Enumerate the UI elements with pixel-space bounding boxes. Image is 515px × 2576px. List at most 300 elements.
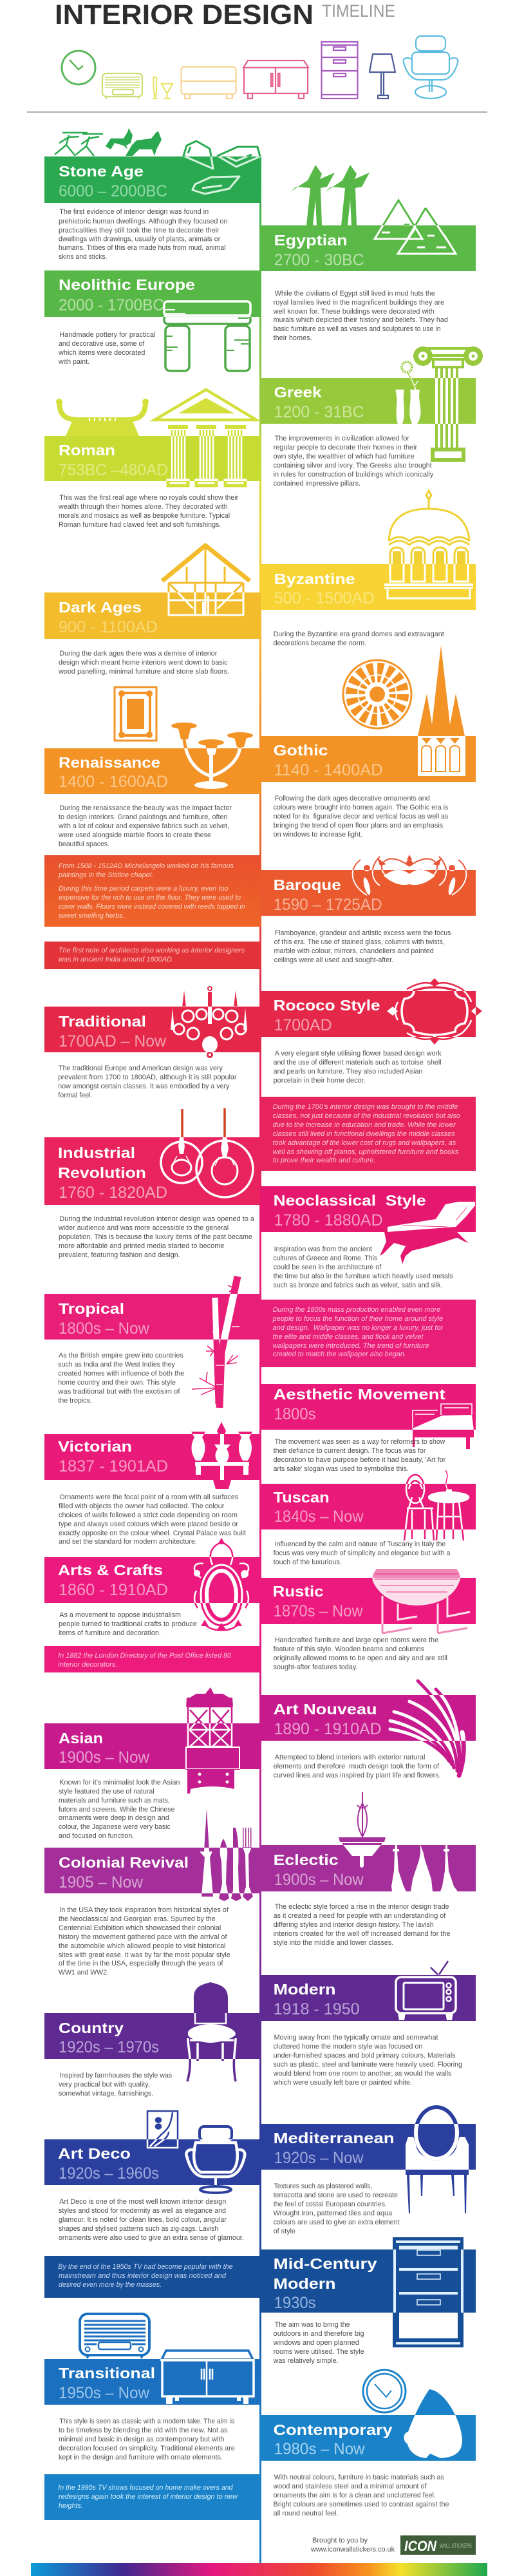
description: and focused on function.	[59, 1832, 134, 1840]
bar	[44, 1294, 261, 1340]
icon: cutlery	[200, 1808, 253, 1901]
section: Asian	[44, 1687, 261, 1840]
bar	[44, 1137, 261, 1205]
heading: Industrial	[58, 1144, 135, 1161]
callout: mass production: wallpapers were introduced. The trend of furniture	[273, 1342, 429, 1350]
description	[59, 1611, 197, 1637]
description: all round neutral feel.	[274, 2510, 339, 2517]
description: Inspired by farmhouses the style was	[59, 2072, 173, 2079]
centre timeline line	[259, 156, 261, 2563]
section: Tropical	[44, 1276, 261, 1408]
description	[58, 331, 156, 366]
description	[58, 650, 229, 676]
logo: WALL STICKERS	[440, 2543, 472, 2549]
description: ornaments the aim is for a clean and uncluttered feel.	[274, 2492, 436, 2499]
description: more affordable and printed media started to become	[59, 1242, 224, 1250]
icon: cabinet	[186, 1687, 239, 1794]
description: WW1 and WW2.	[59, 1969, 109, 1976]
description: A very elegant style utilising flower based design work	[275, 1050, 442, 1057]
icon: sideboard	[243, 61, 308, 99]
icon: armchair	[404, 36, 458, 99]
heading: Mid-Century	[274, 2255, 377, 2272]
callout: 1990s TV	[44, 2474, 261, 2520]
description: and set the standard for modern architecture.	[59, 1538, 197, 1546]
description: style featured the use of natural	[59, 1788, 154, 1795]
description: somewhat vintage, furnishings.	[59, 2090, 153, 2098]
description: home country and their own. This style	[58, 1379, 176, 1387]
heading: Revolution	[58, 1164, 146, 1181]
callout: middle classes	[260, 1097, 476, 1171]
dates: 1900s – Now	[274, 1871, 364, 1889]
icon: ottoman	[182, 67, 236, 99]
description: ceilings were all used and sought-after.	[274, 956, 393, 964]
description: with a lot of colour and expensive fabrics such as velvet,	[58, 822, 229, 830]
heading: Mediterranean	[274, 2130, 395, 2146]
bar	[260, 1484, 476, 1530]
description: minimal and basic in design as contemporary but with	[59, 2436, 224, 2443]
description: colour, the Japanese were very basic	[59, 1823, 171, 1831]
dates: 1918 - 1950	[274, 2000, 360, 2018]
logo	[400, 2535, 476, 2555]
description: very practical but with quality,	[59, 2081, 150, 2088]
bar	[260, 1186, 476, 1232]
description	[59, 1779, 180, 1840]
description: Influenced by the calm and nature of Tuscany in Italy the	[275, 1540, 445, 1548]
description: population. This is because the luxury items of the past became	[59, 1233, 252, 1241]
description: Attempted to blend interiors with exterior natural	[275, 1754, 425, 1761]
description: well known for. These buildings were decorated with	[273, 308, 435, 316]
icon: hunters and deer	[55, 128, 162, 156]
description: marble with colour, mirrors, chandeliers and painted	[274, 947, 434, 955]
callout: London Directory	[44, 1646, 261, 1672]
icon: painting	[147, 2111, 178, 2148]
bar	[260, 991, 476, 1037]
description	[58, 494, 239, 529]
dates: 1890 - 1910AD	[274, 1720, 382, 1738]
description: sought-after features today.	[274, 1663, 357, 1671]
icon: spires	[418, 645, 465, 776]
heading: Rococo Style	[274, 997, 380, 1014]
heading: Contemporary	[274, 2421, 393, 2438]
heading: Art Deco	[58, 2145, 131, 2162]
icon: chair	[187, 1982, 236, 2081]
description	[59, 208, 228, 261]
description	[274, 1245, 453, 1289]
icon: drop-leaf table	[373, 1569, 470, 1633]
heading: Aesthetic Movement	[274, 1386, 445, 1403]
description: of style	[274, 2228, 295, 2235]
bar	[44, 1723, 261, 1769]
icon: dressing table	[406, 2107, 469, 2213]
section: Mid-Century Modern	[260, 2237, 476, 2365]
description: Centennial Exhibition which showcased their colonial	[59, 1924, 221, 1932]
description	[59, 2198, 244, 2242]
description: choices of walls followed a strict code depending on room	[59, 1511, 238, 1519]
description: sites with great ease. It was by far the most popular style	[59, 1951, 230, 1959]
callout: Michelangelo and carpets	[44, 855, 261, 927]
description: wealth through their homes alone. They decorated with	[58, 503, 228, 511]
description: filled with objects the owner had collected. The colour	[59, 1502, 225, 1510]
icon: pendant lamp	[339, 1792, 386, 1868]
callout: 1950s TV	[44, 2256, 261, 2298]
description	[273, 2034, 462, 2087]
description: cluttered home the modern style was focused on	[274, 2043, 422, 2050]
bar	[44, 156, 261, 203]
dates: 1700AD – Now	[59, 1032, 167, 1050]
description: decorations became the norm.	[274, 639, 366, 647]
callout: Michelangelo and carpets: During this time period carpets were a luxury, even too	[59, 885, 229, 893]
description: The first evidence of interior design was found in	[59, 208, 209, 216]
description: could be seen in the architecture of	[274, 1264, 382, 1271]
description	[274, 630, 444, 647]
section: Modern	[260, 1961, 476, 2087]
section: Dark Ages	[44, 545, 261, 676]
bar	[44, 1557, 261, 1603]
callout: mass production	[260, 1300, 476, 1367]
dates: 1760 - 1820AD	[59, 1184, 167, 1202]
dates: 1700AD	[274, 1016, 332, 1034]
icon: lamp	[370, 54, 395, 99]
icon: plume	[390, 1681, 464, 1776]
section: Traditional	[44, 987, 261, 1099]
dates: 1800s – Now	[59, 1320, 150, 1338]
dates: 1780 - 1880AD	[274, 1211, 383, 1229]
rainbow footer bar	[31, 2563, 487, 2576]
bar	[260, 2415, 476, 2461]
icon: stones	[183, 141, 260, 194]
description: Art Deco is one of the most well known interior design	[59, 2198, 226, 2206]
bar	[260, 1975, 476, 2021]
heading: Dark Ages	[59, 599, 142, 616]
heading: Roman	[59, 442, 115, 459]
icon: vases and flower	[395, 362, 420, 424]
heading	[58, 1144, 146, 1181]
bar	[260, 564, 476, 610]
section: Country	[44, 1982, 261, 2098]
callout: London Directory: interior decorators.	[58, 1661, 118, 1669]
section: Tuscan	[260, 1470, 476, 1566]
description: humans. Tribes of this era made huts from mud, animal	[59, 244, 225, 252]
callout: Michelangelo and carpets: paintings in the Sistine chapel.	[58, 871, 153, 879]
description: During the dark ages there was a demise of interior	[59, 650, 218, 658]
section: Stone Age	[44, 128, 261, 261]
callout: middle classes: due to the increase in education and trade. While the lower	[273, 1121, 456, 1129]
bar	[44, 2139, 261, 2185]
bar	[260, 225, 476, 271]
icon: figures	[290, 165, 370, 225]
bar	[260, 870, 476, 916]
furniture icon row	[62, 36, 458, 99]
description: their defiance to current design. The focus was for	[274, 1447, 426, 1455]
bar	[260, 736, 476, 782]
section: Mediterranean	[260, 2107, 476, 2235]
bar	[44, 748, 261, 794]
dates: 900 - 1100AD	[59, 618, 158, 636]
description: styles and stood for modernity as well as elegance and	[59, 2207, 226, 2215]
icon: radio	[80, 2314, 149, 2359]
dates: 1837 - 1901AD	[59, 1457, 168, 1475]
description: was traditional but with the exotisim of	[57, 1388, 180, 1396]
section: Contemporary	[260, 2370, 476, 2517]
icon: candelabra	[171, 723, 253, 789]
description: dwellings with drawings, usually of plants, animals or	[59, 236, 221, 243]
description: originally allowed rooms to be open and airy and are still	[274, 1654, 447, 1662]
description: The traditional Europe and American design was very	[59, 1065, 223, 1072]
heading: Country	[59, 2020, 124, 2036]
description: rooms were utilised. The style	[274, 2348, 364, 2356]
description: on windows to increase light.	[274, 831, 362, 838]
description: style into the middle and lower classes.	[274, 1939, 393, 1947]
description: noted for its figurative decor and vertical focus as well as	[274, 813, 449, 820]
description: elements and therefore much design took the form of	[274, 1763, 440, 1770]
description: were used alongside marble floors to create these	[58, 831, 211, 839]
dates: 6000 – 2000BC	[59, 182, 167, 200]
description	[274, 929, 451, 964]
description: regular people to decorate their homes in their	[274, 444, 418, 451]
dates: 2700 - 30BC	[274, 251, 364, 269]
bar	[44, 1434, 261, 1480]
description: Wrought iron, patterned tiles and aqua	[274, 2210, 393, 2217]
description: their homes.	[274, 334, 312, 342]
description: Moving away from the typically ornate and somewhat	[274, 2034, 438, 2041]
description: was relatively simple.	[273, 2357, 339, 2365]
callout: 1990s TV: heights.	[59, 2502, 83, 2510]
dates: 1800s	[274, 1405, 316, 1423]
description: Handmade pottery for practical	[59, 331, 156, 339]
bar	[44, 592, 261, 639]
section: Rococo Style	[260, 978, 482, 1084]
icon: vases	[391, 1844, 458, 1891]
description: morals and mosaics as well as bespoke furniture. Typical	[59, 512, 230, 520]
logo: ICON	[404, 2538, 437, 2554]
dates: 1920s – Now	[274, 2149, 364, 2167]
description: Known for it's minimalist look the Asian	[59, 1779, 180, 1786]
description	[59, 1906, 230, 1976]
description: the tropics.	[58, 1397, 92, 1405]
callout: Michelangelo and carpets: sweet smelling herbs.	[59, 912, 125, 920]
bar	[44, 2359, 261, 2405]
description: formal feel.	[58, 1092, 93, 1099]
icon: chaise longue	[380, 1202, 475, 1264]
section: Neoclassical Style	[260, 1186, 476, 1289]
section: Art Nouveau	[260, 1681, 476, 1779]
heading: Asian	[59, 1730, 103, 1747]
description: which were usually left bare or painted white.	[273, 2079, 412, 2087]
description: Inspiration was from the ancient	[274, 1245, 372, 1253]
description	[273, 2474, 449, 2517]
section: Transitional	[44, 2314, 261, 2461]
callout: London Directory: In 1882 the London Directory of the Post Office listed 80	[58, 1652, 232, 1660]
heading: Byzantine	[274, 571, 355, 587]
description	[274, 435, 434, 488]
description: history the movement gathered pace with the arrival of	[59, 1933, 227, 1941]
heading: Neolithic Europe	[59, 276, 195, 293]
description	[58, 1065, 237, 1099]
icon: bamboo	[192, 1276, 239, 1408]
description: created homes with influence of both the	[58, 1370, 184, 1378]
description: colours are used to give an extra element	[274, 2219, 399, 2226]
description	[59, 2418, 235, 2461]
description: During the Byzantine era grand domes and extravagant	[274, 630, 444, 638]
description: During the industrial revolution interior design was opened to a	[59, 1215, 255, 1223]
description	[274, 1754, 441, 1779]
heading: Renaissance	[59, 754, 160, 771]
callout: architects in India: The first note of architects also working as interior designers	[59, 947, 245, 954]
description: terracotta and stone are used to recreate	[274, 2192, 398, 2199]
heading: Greek	[274, 384, 322, 401]
callout: mass production: created to match the wallpaper also began.	[273, 1350, 406, 1358]
title: INTERIOR DESIGN	[55, 0, 314, 30]
icon: rose window	[343, 660, 411, 728]
heading: Gothic	[274, 742, 328, 759]
section: Baroque	[260, 855, 476, 964]
description: windows and open planned	[273, 2339, 359, 2347]
heading: Rustic	[273, 1583, 324, 1600]
dates: 1950s – Now	[59, 2384, 150, 2402]
description: glamour. It is noted for clean lines, bold colour, angular	[59, 2216, 227, 2224]
description: the automobile which allowed people to visit historical	[59, 1942, 225, 1950]
callout: Michelangelo and carpets: expensive for the rich to use on the floor. They were used to	[59, 894, 241, 902]
description	[274, 1050, 442, 1084]
description: and decorative use, some of	[59, 340, 145, 348]
description: Following the dark ages decorative ornaments and	[275, 795, 430, 802]
heading: Tuscan	[274, 1489, 330, 1506]
description	[58, 1215, 255, 1259]
description	[274, 795, 449, 838]
icon: armchair	[186, 2126, 245, 2193]
description: ornaments were also used to give an extra sense of glamour.	[59, 2234, 244, 2242]
description: the time but also in the furniture which heavily used metals	[274, 1273, 453, 1280]
section: Gothic	[260, 645, 476, 838]
dates: 1900s – Now	[59, 1748, 150, 1766]
heading	[274, 2255, 377, 2292]
callout: middle classes: to prove their wealth and culture.	[273, 1157, 376, 1164]
description: As the British empire grew into countries	[59, 1352, 183, 1359]
description: As a movement to oppose industrialism	[59, 1611, 181, 1619]
description: With neutral colours, furniture in basic materials such as	[274, 2474, 444, 2481]
icon: picture frame	[115, 687, 156, 741]
description: of this era. The use of stained glass, columns with twists,	[274, 938, 445, 946]
description: wood panelling, minimal furniture and stone slab floors.	[58, 668, 229, 676]
credit	[310, 2537, 395, 2553]
description	[57, 1352, 184, 1405]
description: decoration focused on simplicity. Traditional elements are	[59, 2445, 235, 2452]
description: differing styles and interior design history. The lavish	[274, 1921, 434, 1929]
dates: 500 - 1500AD	[274, 589, 375, 607]
description	[59, 1493, 246, 1546]
description: touch of the luxurious.	[274, 1558, 342, 1566]
description	[274, 2183, 399, 2235]
heading: Modern	[274, 1981, 336, 1998]
description: futons and screens. While the Chinese	[59, 1806, 175, 1814]
callout: Michelangelo and carpets: cover walls. Floors were instead covered with reeds topped in	[59, 903, 245, 911]
dates: 1980s – Now	[274, 2440, 365, 2458]
bar	[260, 1695, 476, 1741]
description: The improvements in civilization allowed for	[275, 435, 409, 442]
description	[274, 1438, 446, 1473]
description: feature of this style. Wooden beams and columns	[274, 1645, 424, 1653]
description	[274, 1540, 451, 1566]
callout: 1990s TV: In the 1990s TV shows focused on home make overs and	[58, 2484, 233, 2492]
description: the Neoclassical and Georgian eras. Spurred by the	[59, 1915, 216, 1923]
heading: Eclectic	[274, 1852, 339, 1868]
section: Renaissance	[44, 687, 261, 848]
description: basic furniture as well as vases and sculptures to use in	[274, 325, 441, 333]
icon: filing cabinet	[322, 42, 358, 99]
section: Art Deco	[44, 2111, 261, 2242]
dates: 1140 - 1400AD	[274, 761, 383, 779]
description: This style is seen as classic with a modern take. The aim is	[59, 2418, 235, 2425]
description: murals which depicted their history and beliefs. They had	[274, 316, 448, 324]
description: exactly opposite on the colour wheel. Crystal Palace was built	[59, 1530, 246, 1537]
title: TIMELINE	[322, 1, 395, 21]
heading: Baroque	[274, 876, 341, 893]
description	[58, 804, 232, 848]
callout: 1950s TV: mainstream and thus interior design was noticed and	[59, 2272, 227, 2280]
dates: 2000 - 1700BC	[59, 296, 164, 314]
description: cultures of Greece and Rome. This	[274, 1255, 378, 1262]
callout: mass production: people to focus the function of their home around style	[272, 1315, 443, 1323]
description	[274, 1636, 447, 1671]
description: such as plastic, steel and laminate were heavily used. Flooring	[274, 2061, 462, 2069]
description: kept in the design and furniture with ornate elements.	[59, 2454, 223, 2461]
description: of the time in the USA, especially through the years of	[59, 1960, 223, 1967]
bar	[260, 2124, 476, 2170]
dates: 1920s – 1960s	[59, 2164, 159, 2183]
description	[59, 2072, 173, 2098]
description: prehistoric human dwellings. Although they focused on	[59, 218, 228, 225]
icon: sideboard	[162, 2351, 254, 2404]
credit: www.iconwallstickers.co.uk	[310, 2546, 395, 2553]
description	[273, 2321, 364, 2365]
icon: ornate mirror	[194, 1538, 248, 1631]
description: people turned to traditional crafts to produce	[59, 1620, 197, 1628]
description: and pearls on furniture. They also included Asian	[274, 1068, 422, 1075]
section: Byzantine	[260, 491, 476, 647]
bar	[44, 1848, 261, 1893]
description: The aim was to bring the	[275, 2321, 350, 2329]
dates: 1905 – Now	[59, 1873, 144, 1891]
description: skins and sticks.	[59, 253, 107, 261]
description: with paint.	[58, 358, 89, 366]
description: to be timeless by blending the old with the new. Not as	[59, 2427, 228, 2434]
callout: mass production: During the 1800s mass production enabled even more	[273, 1306, 440, 1314]
description: Bright colours are sometimes used to contrast against the	[274, 2501, 449, 2508]
description: royal families lived in the magnificent buildings they are	[274, 299, 444, 307]
description: design which meant home interiors went down to basic	[59, 659, 228, 667]
heading: Neoclassical Style	[274, 1192, 426, 1209]
icon: clock	[62, 51, 95, 84]
description: materials and furniture such as mats,	[59, 1797, 170, 1804]
description: In the USA they took inspiration from historical styles of	[59, 1906, 229, 1914]
heading: Traditional	[59, 1013, 146, 1030]
callout: architects in India	[44, 942, 261, 969]
icon: television	[396, 1961, 456, 2020]
dates: 1840s – Now	[274, 1508, 364, 1526]
heading: Arts & Crafts	[58, 1562, 163, 1578]
bar	[44, 1007, 261, 1052]
description: While the civilians of Egypt still lived in mud huts the	[275, 290, 435, 298]
description: curved lines and was inspired by plant life and flowers.	[274, 1772, 441, 1779]
dates: 1920s – 1970s	[59, 2038, 159, 2056]
heading: Art Nouveau	[274, 1701, 377, 1718]
callout: 1950s TV: By the end of the 1950s TV had become popular with the	[58, 2263, 233, 2271]
icon: radio	[102, 73, 142, 99]
callout: middle classes: classes, not just because of the industrial revolution but also	[273, 1112, 460, 1120]
description: to design interiors. Grand paintings and furniture, often	[59, 813, 228, 821]
description: and the use of different materials such as tortoise shell	[274, 1059, 442, 1066]
callout: architects in India: was in ancient India around 1600AD.	[59, 956, 174, 963]
